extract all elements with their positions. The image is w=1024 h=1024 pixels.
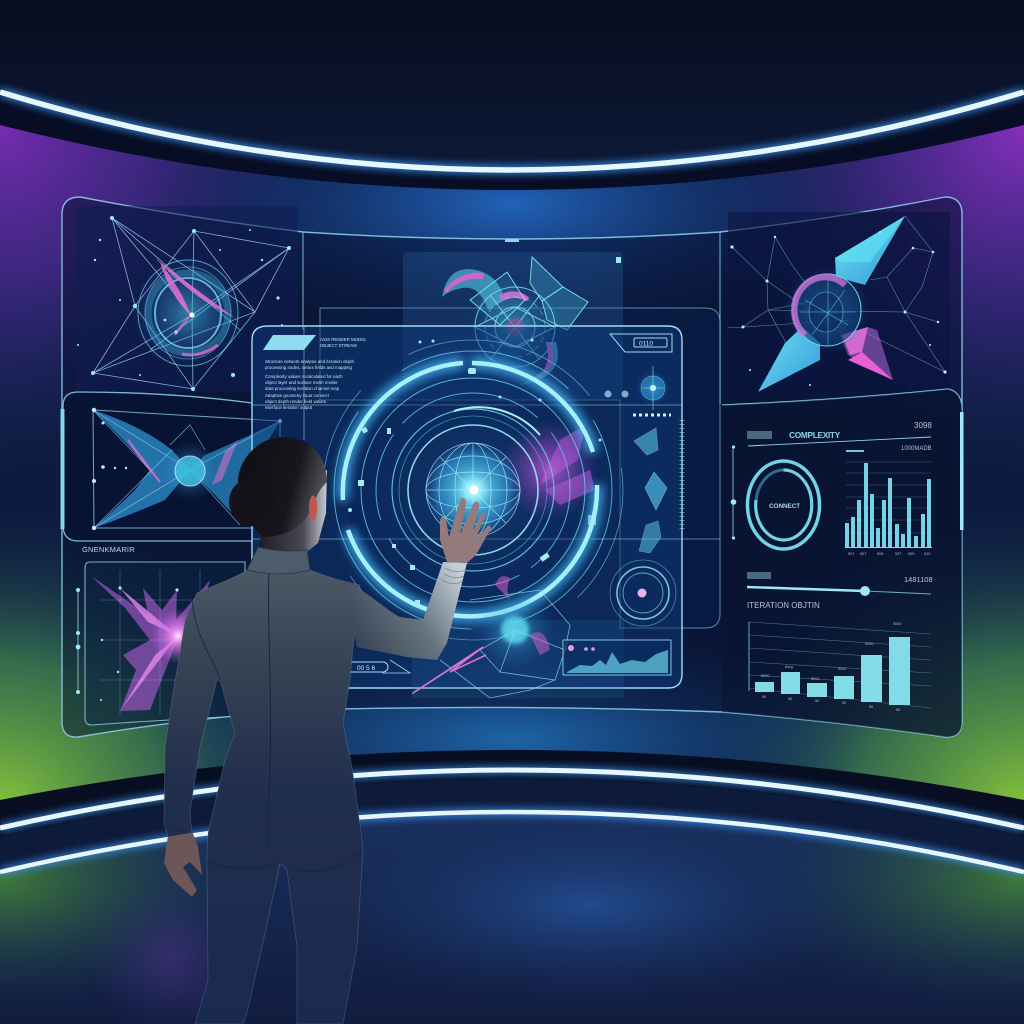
raised arm <box>345 562 467 660</box>
HUD title chip and text block: AXIS RENDER MODEL <box>320 337 367 342</box>
ear <box>309 496 317 520</box>
HUD title chip and text block <box>263 335 367 410</box>
HUD title chip and text block: Complexity values recalculated for each <box>265 374 343 379</box>
panel: top-right blue and magenta star <box>722 212 962 410</box>
lower bar chart: 5000 <box>838 667 846 671</box>
upper bar chart <box>845 450 932 556</box>
lower bar chart: 50 <box>869 705 873 709</box>
raised hand <box>440 498 491 563</box>
upper bar chart: 507 <box>895 552 901 556</box>
vertical slider <box>731 445 736 540</box>
HUD title chip and text block: Structure network analysis and iteration depth <box>265 359 355 364</box>
lower bar chart: Avrg <box>785 665 793 669</box>
lower bar chart: 5000 <box>811 677 819 681</box>
lower bar chart: 50 <box>788 697 792 701</box>
panel: top-centre polygon model <box>403 252 623 400</box>
panel: lower-left magenta star <box>76 562 245 725</box>
analytics title row: 3098 <box>914 421 932 430</box>
suit body, left arm and legs <box>164 547 363 1024</box>
background: ceiling <box>0 0 1024 200</box>
HUD title chip and text block: processing nodes, vertex fields and mapping <box>265 365 352 370</box>
background: curved gradient wall <box>0 120 1024 810</box>
HUD title chip and text block: data processing iteration channel map <box>265 386 340 391</box>
HUD: mini area chart <box>563 640 671 675</box>
arm and body shading <box>165 552 362 871</box>
label: lower-left heading: GNENKMARIR <box>82 545 135 554</box>
analytics title row: COMPLEXITY <box>789 430 841 440</box>
HUD title chip and text block: object depth render field values <box>265 399 327 404</box>
HUD: readout pill <box>340 660 410 673</box>
panel: main HUD card <box>252 326 720 688</box>
HUD: status tag top right: 0110 <box>639 340 653 348</box>
lower bar chart <box>749 622 931 712</box>
floor light strips and base <box>0 750 1024 1024</box>
hair <box>238 437 327 537</box>
panel: lower polygon model <box>412 576 624 698</box>
panel: right analytics <box>722 389 964 737</box>
face and neck <box>258 470 327 552</box>
horizontal slider <box>747 572 933 596</box>
lower bar chart: 5000 <box>865 642 873 646</box>
label: iteration: ITERATION OBJTIN <box>747 601 820 610</box>
analytics title row: 1000MADB <box>901 446 932 452</box>
HUD title chip and text block: Adaptive geometry input connect <box>265 393 330 398</box>
panel: top-left geometric network <box>76 206 298 392</box>
lower bar chart: 50 <box>842 701 846 705</box>
donut gauge: CONNECT <box>769 503 800 510</box>
nebula <box>500 420 600 520</box>
lower bar chart: 5000 <box>893 622 901 626</box>
lower bar chart: 50 <box>762 695 766 699</box>
collar <box>247 547 310 574</box>
main radial dial <box>323 338 623 640</box>
HUD: status tag top right <box>610 334 672 352</box>
HUD title chip and text block: object layer and surface mesh render <box>265 380 338 385</box>
HUD: readout pill: 00 5 6 <box>357 665 375 672</box>
hair bun <box>229 478 275 526</box>
HUD: right column icons <box>604 366 682 553</box>
analytics title row <box>747 421 932 452</box>
lower bar chart: 50 <box>815 699 819 703</box>
horizontal slider: 1481108 <box>904 575 933 584</box>
panel: back central card <box>320 308 720 628</box>
HUD: small radar with pink dot <box>610 560 676 626</box>
ceiling light strip <box>0 92 1024 190</box>
HUD title chip and text block: interface iteration output <box>265 405 313 410</box>
upper bar chart: 510 <box>924 552 930 556</box>
upper bar chart: 509 <box>908 552 914 556</box>
holographic screen frame <box>62 197 962 737</box>
donut gauge <box>748 461 820 549</box>
left hand <box>164 831 202 897</box>
upper bar chart: 507 <box>848 552 854 556</box>
panel: middle-left bow-tie network <box>60 392 303 541</box>
upper bar chart: 508 <box>877 552 883 556</box>
lower bar chart: 50 <box>896 708 900 712</box>
upper bar chart: 507 <box>860 552 866 556</box>
lower bar chart: 5000 <box>761 674 769 678</box>
figure: woman touching the screen <box>164 437 491 1024</box>
sleeve cuff lines <box>442 568 466 584</box>
HUD title chip and text block: OBJECT STREAM <box>320 343 357 348</box>
